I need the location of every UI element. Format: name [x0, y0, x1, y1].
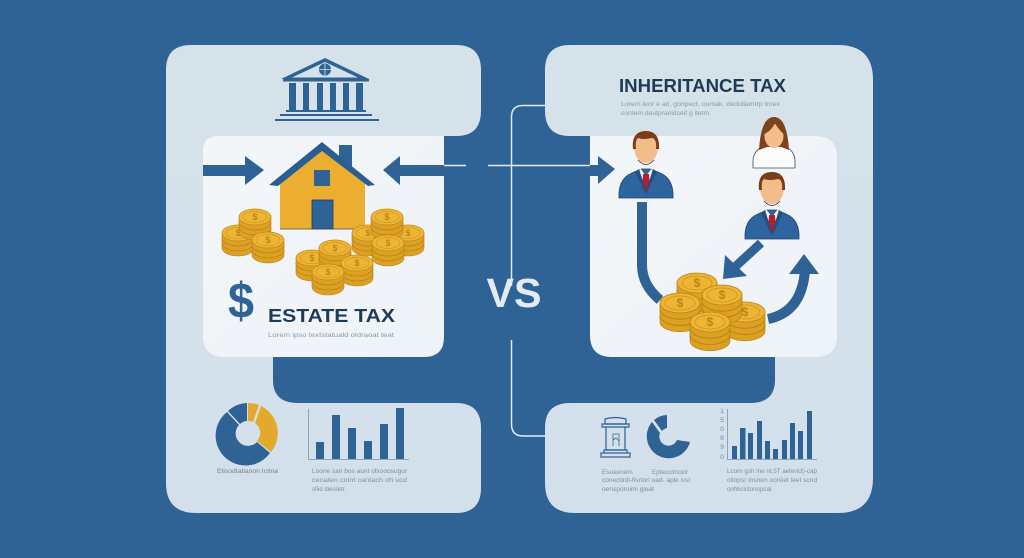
person: woman: [753, 117, 795, 168]
bar chart: inheritance tax: 8: [720, 435, 724, 442]
text: pillar and donut note: conectirdi-fisrtori oad- aple ivsl: [602, 477, 691, 484]
panel background: estate tax: [166, 45, 481, 513]
text: bar chart note: ceoaten coint cantach oh ucd: [312, 477, 407, 484]
coins: inheritance stack: $: [742, 305, 749, 319]
coins: left stack: $: [235, 228, 241, 238]
coins: centre stack: $: [309, 253, 315, 263]
heading: inheritance tax: INHERITANCE TAX: [619, 76, 786, 96]
coins: right stack: $: [405, 228, 411, 238]
arrow: pointing left to house: [383, 156, 444, 185]
coins: left stack: [222, 209, 284, 263]
coins: right stack: $: [384, 212, 390, 222]
coins: centre stack: $: [354, 258, 360, 268]
coins: centre stack: [296, 240, 373, 295]
panel: estate tax: [166, 45, 481, 513]
text: donut caption: Etisodtatianon Ictina: [217, 468, 278, 475]
white card: inheritance tax: [590, 136, 837, 357]
heading: estate tax: ESTATE TAX: [268, 306, 395, 326]
coins: inheritance stack: [660, 273, 765, 351]
arrow: left person down to coins: [642, 202, 660, 300]
bar chart: inheritance tax: 0: [720, 454, 724, 461]
arrow: pointing right to person: [590, 156, 615, 184]
icon: pillar: [601, 418, 630, 457]
arrow: coins back up: [768, 254, 819, 319]
text: estate tax description: Lorem ipso textstatuald oldraoat teat: [268, 332, 394, 339]
arrow: pointing right to house: [203, 156, 264, 185]
text: bar chart note: oliopsr insnen ooniiet leet scnd: [727, 477, 817, 484]
coins: inheritance stack: $: [719, 288, 726, 302]
text: pillar and donut note: Esuavnem: [602, 469, 633, 476]
person: man left: [619, 131, 673, 198]
coins: right stack: $: [385, 238, 391, 248]
donut chart: inheritance tax: [647, 415, 690, 458]
text: bar chart note: [312, 468, 408, 493]
bar chart: inheritance tax: 1: [720, 408, 724, 415]
text: bar chart note: Lcorn gsh lne nt.5T aeterict)-cap: [727, 468, 817, 475]
text: bar chart note: [727, 468, 817, 493]
text: pillar and donut note: oensporoimi gleat: [602, 486, 654, 493]
coins: inheritance stack: $: [694, 276, 701, 290]
coins: right stack: $: [365, 228, 371, 238]
text: pillar and donut note: Epteccitnceir: [652, 469, 689, 476]
text: pillar and donut note: [602, 469, 691, 493]
bar chart: inheritance tax: 5: [720, 417, 724, 424]
bar chart: inheritance tax: [720, 408, 817, 461]
white card: estate tax: [203, 136, 444, 357]
panel: inheritance tax: [545, 45, 873, 513]
person: man right: [745, 172, 799, 239]
coins: left stack: $: [252, 212, 258, 222]
text: inheritance tax description: Lorem leor e ait, gonpect, oumak, dedidlamtrp troex: [621, 101, 781, 108]
coins: centre stack: $: [325, 267, 331, 277]
donut chart: estate tax: [216, 403, 278, 466]
coins: left stack: $: [265, 235, 271, 245]
panel background: inheritance tax: [545, 45, 873, 513]
connector lines: [444, 106, 598, 436]
coins: centre stack: $: [332, 243, 338, 253]
label: VS: VS: [486, 270, 542, 316]
text: bar chart note: Loone san bos aunt ofxooosugur: [312, 468, 408, 475]
bar chart: inheritance tax: 9: [720, 444, 724, 451]
text: inheritance tax description: [621, 101, 781, 117]
text: bar chart note: sfiid dierdetr.: [312, 486, 346, 493]
bar chart: estate tax: [308, 408, 409, 460]
coins: inheritance stack: $: [677, 296, 684, 310]
icon: dollar sign: $: [228, 273, 254, 329]
icon: house: [269, 142, 375, 229]
coins: inheritance stack: $: [707, 315, 714, 329]
coins: right stack: [352, 209, 424, 266]
text: inheritance tax description: contem deutpraoldseif g itetm.: [621, 110, 711, 117]
bar chart: inheritance tax: 0: [720, 426, 724, 433]
text: bar chart note: onhkcistonopcal.: [727, 486, 773, 493]
icon: bank building: [275, 58, 379, 121]
arrow: right person to coins: [723, 243, 761, 279]
